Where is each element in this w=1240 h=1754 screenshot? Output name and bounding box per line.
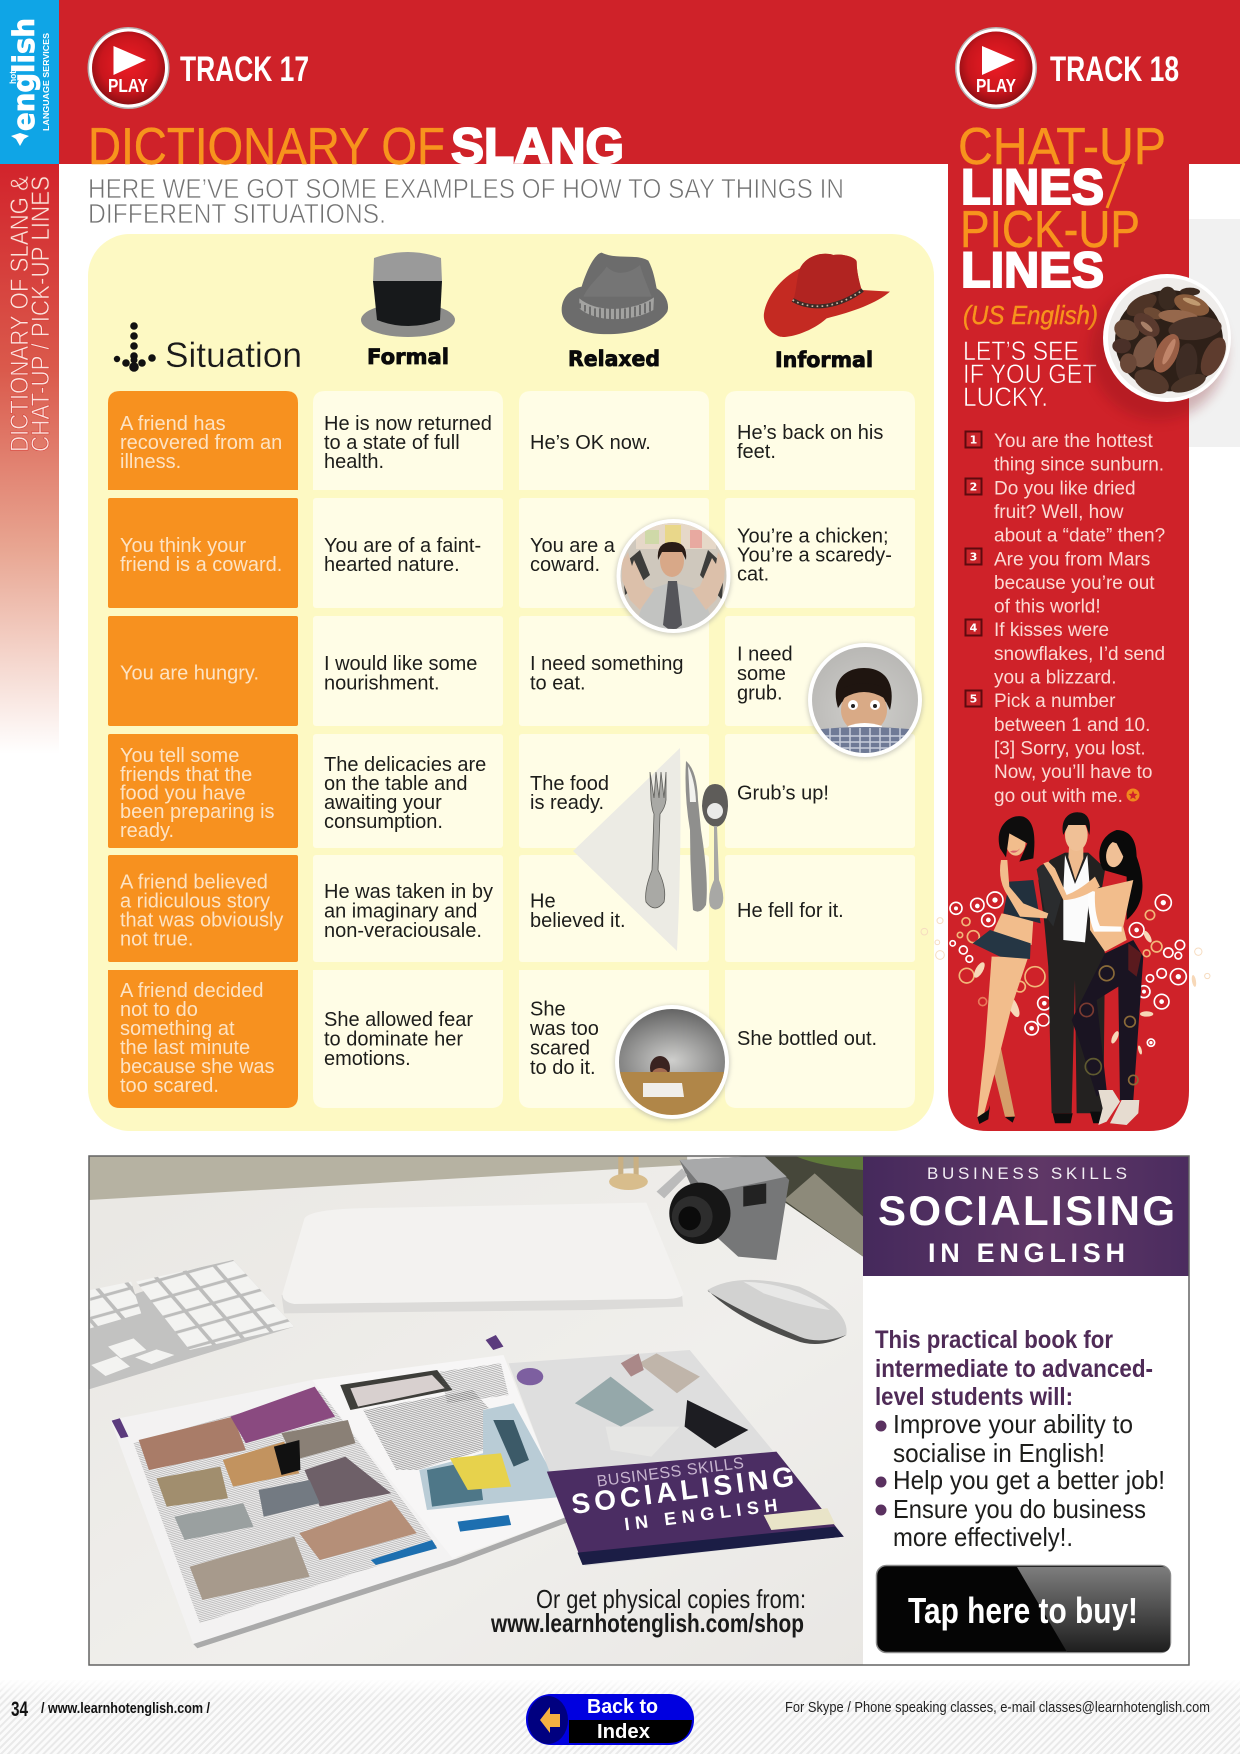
bowl backdrop <box>1189 219 1240 447</box>
book header: BUSINESS SKILLS <box>927 1164 1127 1183</box>
row 1: recovered <box>108 391 915 490</box>
book intro: level students will: <box>875 1383 1073 1411</box>
row 4 situation: been preparing is <box>120 801 275 823</box>
row 2 formal <box>313 498 503 608</box>
side label line 1: DICTIONARY OF SLANG & <box>6 176 34 452</box>
row 5 informal: He fell for it. <box>737 900 844 922</box>
row 5 relaxed: He <box>530 890 556 912</box>
line 3: 3 <box>970 550 977 564</box>
book intro: intermediate to advanced- <box>875 1355 1153 1383</box>
row 4: food ready <box>108 734 915 848</box>
book cover text: BUSINESS SKILLS <box>596 1455 745 1491</box>
line 1: 1 <box>970 434 977 446</box>
row 5 situation: that was obviously <box>120 910 283 932</box>
line 1: You are the hottest <box>994 431 1154 452</box>
row 3 informal <box>725 616 915 726</box>
play button: track 17 <box>88 27 170 109</box>
row 2 relaxed: You are a <box>530 535 616 557</box>
photo: place setting with napkin and cutlery <box>573 748 728 951</box>
row 6 informal <box>725 970 915 1108</box>
title: chat-up lines: LINES <box>961 242 1104 298</box>
row 1 informal <box>725 391 915 490</box>
book benefits list: Improve your ability to <box>893 1409 1133 1439</box>
row 6 situation: A friend decided <box>120 980 263 1002</box>
keyboard <box>89 1260 294 1389</box>
intro text: DIFFERENT SITUATIONS. <box>88 198 386 229</box>
row 2 formal: You are of a faint- <box>324 535 481 557</box>
icon: top hat <box>361 252 455 337</box>
column heading: formal: Formal <box>367 345 449 369</box>
top red band <box>59 0 1240 164</box>
line 5 <box>966 690 1152 807</box>
row 4 informal: Grub’s up! <box>737 782 829 804</box>
row 3 informal: some <box>737 663 786 685</box>
decorative swirls <box>921 892 1210 1046</box>
row 6: too scared <box>108 970 915 1108</box>
row 2 formal: hearted nature. <box>324 554 460 576</box>
footer website: / www.learnhotenglish.com / <box>41 1700 211 1717</box>
row 4 informal <box>725 734 915 848</box>
line 2: Do you like dried <box>994 478 1136 499</box>
row 4 formal: consumption. <box>324 811 443 833</box>
book header: SOCIALISING <box>878 1187 1175 1234</box>
back to index button: Index <box>597 1721 650 1743</box>
row 5: believed story <box>108 855 915 962</box>
row 4 situation: friends that the <box>120 764 252 786</box>
book intro <box>875 1326 1153 1411</box>
icon: end star <box>1126 788 1140 802</box>
photo background: desk <box>89 1156 865 1666</box>
row 3: hungry <box>108 616 915 726</box>
row 4 formal <box>313 734 503 848</box>
logo star <box>11 133 29 146</box>
row 6 situation: too scared. <box>120 1075 219 1097</box>
row 2 relaxed: coward. <box>530 554 600 576</box>
book cover text: SOCIALISING <box>570 1461 796 1520</box>
track 17 label: TRACK 17 <box>180 50 309 89</box>
row 1 situation: recovered from an <box>120 432 282 454</box>
panel: chat-up lines <box>921 118 1240 1131</box>
camera <box>657 1156 789 1260</box>
row 6 situation: something at <box>120 1018 235 1040</box>
line 3: because you’re out <box>994 573 1155 594</box>
line 5: between 1 and 10. <box>994 715 1150 736</box>
row 2 situation: friend is a coward. <box>120 554 282 576</box>
line 4: 4 <box>970 622 978 634</box>
laptop <box>282 1203 684 1313</box>
row 2 situation: You think your <box>120 535 246 557</box>
row 4 relaxed: is ready. <box>530 792 604 814</box>
subheading: let's see <box>963 336 1097 412</box>
row 3 relaxed: to eat. <box>530 672 586 694</box>
row 2 informal: You’re a scaredy- <box>737 544 892 566</box>
line 2: 2 <box>970 480 977 494</box>
title: chat-up lines: LINES <box>961 159 1104 215</box>
row 6 relaxed: was too <box>529 1018 599 1040</box>
row 5 formal: He was taken in by <box>324 881 493 903</box>
line 4: snowflakes, I’d send <box>994 644 1165 665</box>
book benefits list: socialise in English! <box>893 1438 1105 1468</box>
row 5 situation: a ridiculous story <box>120 890 270 912</box>
row 2 informal <box>725 498 915 608</box>
title: chat-up lines: PICK-UP <box>960 201 1140 259</box>
row 1 formal <box>313 391 503 490</box>
column heading: informal: Informal <box>775 348 873 372</box>
row 3 formal <box>313 616 503 726</box>
title: chat-up lines: CHAT-UP <box>958 118 1166 176</box>
row 3 situation <box>108 616 298 726</box>
row 6 relaxed <box>519 970 709 1108</box>
row 4 situation: ready. <box>120 820 174 842</box>
row 3 informal: grub. <box>737 682 783 704</box>
logo panel <box>0 0 59 164</box>
play button: track 17: PLAY <box>108 76 148 96</box>
subheading: let's see: LUCKY. <box>963 382 1048 412</box>
row 1 situation: A friend has <box>120 413 226 435</box>
book benefits list <box>876 1409 1165 1552</box>
line 1: thing since sunburn. <box>994 455 1164 476</box>
subtitle: US English: (US English) <box>963 300 1098 330</box>
row 1 situation <box>108 391 298 490</box>
caption: physical copies: www.learnhotenglish.com/shop <box>490 1608 804 1638</box>
row 6 relaxed: to do it. <box>530 1057 596 1079</box>
open magazine <box>111 1335 570 1648</box>
row 6 relaxed: She <box>530 998 566 1020</box>
row 5 formal <box>313 855 503 962</box>
track 18 label: TRACK 18 <box>1050 50 1179 89</box>
row 3 formal: I would like some <box>324 653 477 675</box>
subheading: let's see: LET’S SEE <box>963 336 1079 366</box>
row 6 situation: because she was <box>120 1056 275 1078</box>
icon: bowl of dates <box>1090 274 1231 420</box>
book intro: This practical book for <box>875 1326 1113 1354</box>
row 1 formal: health. <box>324 451 384 473</box>
book header <box>863 1156 1189 1276</box>
title: chat-up lines <box>958 118 1166 298</box>
main title: SLANG <box>451 118 624 174</box>
row 6 formal: She allowed fear <box>324 1009 473 1031</box>
icon: fedora hat <box>562 253 668 334</box>
row 4 situation <box>108 734 298 848</box>
play button: track 18: PLAY <box>976 76 1016 96</box>
row 4 formal: awaiting your <box>324 792 442 814</box>
row 3 situation: You are hungry. <box>120 662 259 684</box>
socialising book <box>509 1350 844 1566</box>
row 4 formal: The delicacies are <box>324 754 486 776</box>
row 4 relaxed <box>519 734 709 848</box>
row 2: coward <box>108 498 915 608</box>
line 5: Now, you’ll have to <box>994 762 1152 783</box>
row 1 informal: feet. <box>737 441 776 463</box>
row 1 relaxed <box>519 391 709 490</box>
intro text <box>88 173 844 229</box>
row 5 relaxed <box>519 855 709 962</box>
row 6 informal: She bottled out. <box>737 1028 877 1050</box>
back to index button <box>526 1694 694 1745</box>
caption: physical copies: Or get physical copies from: <box>536 1584 806 1614</box>
numbered pick-up lines <box>966 431 1165 807</box>
row 1 formal: He is now returned <box>324 413 492 435</box>
intro text: HERE WE’VE GOT SOME EXAMPLES OF HOW TO SAY THINGS IN <box>88 173 844 204</box>
row 1 relaxed: He’s OK now. <box>530 432 651 454</box>
row 3 relaxed: I need something <box>530 653 683 675</box>
line 3: of this world! <box>994 597 1101 618</box>
line 4 <box>966 620 1165 688</box>
main title: DICTIONARY OF <box>88 118 445 176</box>
row 5 relaxed: believed it. <box>530 910 626 932</box>
row 2 informal: You’re a chicken; <box>737 526 889 548</box>
caption: physical copies <box>491 1589 804 1638</box>
row 6 situation: not to do <box>120 999 198 1021</box>
row 2 informal: cat. <box>737 564 769 586</box>
logo tagline: LANGUAGE SERVICES <box>42 32 51 131</box>
heading: situation: Situation <box>165 336 302 375</box>
wooden stand <box>609 1156 648 1190</box>
play button: track 18 <box>955 27 1037 109</box>
row 2 situation <box>108 498 298 608</box>
row 5 informal <box>725 855 915 962</box>
row 6 relaxed: scared <box>530 1038 590 1060</box>
footer band <box>0 1680 1240 1754</box>
icon: cowboy hat <box>764 254 890 337</box>
row 5 formal: non-veraciousale. <box>324 920 482 942</box>
book benefits list: Help you get a better job! <box>893 1465 1165 1495</box>
row 4 situation: food you have <box>120 782 246 804</box>
row 6 formal <box>313 970 503 1108</box>
line 3 <box>966 548 1155 618</box>
mouse <box>708 1280 847 1344</box>
line 5: go out with me. <box>994 786 1123 807</box>
book header: IN ENGLISH <box>928 1238 1125 1268</box>
line 3: Are you from Mars <box>994 549 1150 570</box>
line 5: Pick a number <box>994 691 1116 712</box>
line 5: [3] Sorry, you lost. <box>994 738 1146 760</box>
back to index button: Back to <box>587 1696 658 1718</box>
row 1 situation: illness. <box>120 451 181 473</box>
row 5 formal: an imaginary and <box>324 900 477 922</box>
row 4 situation: You tell some <box>120 745 239 767</box>
row 6 situation <box>108 970 298 1108</box>
row 2 relaxed <box>519 498 709 608</box>
book benefits list: more effectively!. <box>893 1522 1073 1552</box>
row 5 situation <box>108 855 298 962</box>
logo word hot: hot <box>8 71 18 84</box>
buy button <box>876 1566 1170 1652</box>
line 4: If kisses were <box>994 620 1109 641</box>
buy button: Tap here to buy! <box>908 1590 1138 1631</box>
line 2: fruit? Well, how <box>994 502 1124 523</box>
photo: hungry man biting tablecloth <box>807 643 923 760</box>
row 5 situation: not true. <box>120 928 193 950</box>
figure: woman in patterned trousers <box>1043 830 1143 1125</box>
photo: scared man hands up <box>616 519 732 635</box>
figure: man in black suit <box>1037 812 1105 1123</box>
side label line 2: CHAT-UP / PICK-UP LINES <box>27 176 55 452</box>
logo word english: english <box>7 18 41 131</box>
row 1 informal: He’s back on his <box>737 422 883 444</box>
row 6 formal: to dominate her <box>324 1028 463 1050</box>
row 1 formal: to a state of full <box>324 432 460 454</box>
panel: promotional photo <box>89 1156 1189 1666</box>
row 4 relaxed: The food <box>530 773 609 795</box>
subheading: let's see: IF YOU GET <box>963 359 1097 389</box>
left side strip <box>0 164 59 754</box>
row 3 relaxed <box>519 616 709 726</box>
line 4: you a blizzard. <box>994 668 1117 688</box>
photo: frightened woman behind desk <box>614 1005 730 1122</box>
icon: situation dots <box>114 322 156 372</box>
book benefits list: Ensure you do business <box>893 1494 1146 1524</box>
panel: book description <box>863 1156 1189 1665</box>
row 6 formal: emotions. <box>324 1048 411 1070</box>
row 6 situation: the last minute <box>120 1037 250 1059</box>
column heading: relaxed: Relaxed <box>568 347 660 371</box>
line 2: about a “date” then? <box>994 526 1165 547</box>
row 3 informal: I need <box>737 644 793 666</box>
row 5 situation: A friend believed <box>120 872 268 894</box>
row 3 formal: nourishment. <box>324 672 440 694</box>
row 4 formal: on the table and <box>324 773 467 795</box>
book cover text: IN ENGLISH <box>623 1495 779 1534</box>
figure: woman in black top and skirt <box>973 816 1048 1124</box>
page number: 34 <box>11 1698 28 1721</box>
line 1 <box>966 431 1164 476</box>
line 5: 5 <box>970 692 977 706</box>
illustration: man with two women <box>921 812 1210 1125</box>
panel: slang table <box>88 234 934 1131</box>
line 2 <box>966 478 1165 547</box>
